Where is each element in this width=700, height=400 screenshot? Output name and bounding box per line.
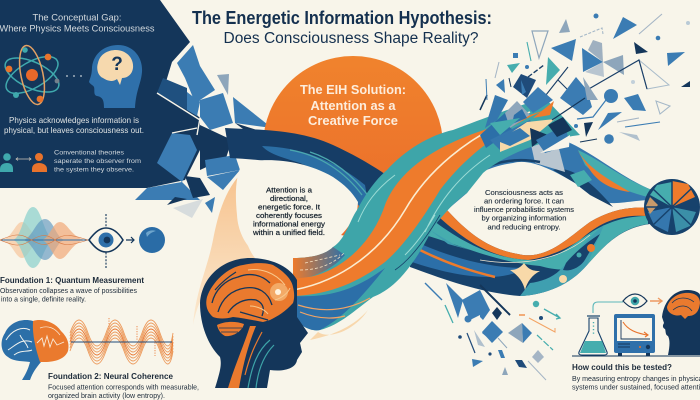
left text bubble copy: within a unified field. xyxy=(252,228,325,237)
icon: head with question brain xyxy=(89,45,142,108)
dots between atom and head xyxy=(66,75,82,77)
icon: head with question brain: ? xyxy=(111,54,123,75)
orange circle heading: Creative Force xyxy=(308,114,398,128)
right text bubble copy xyxy=(474,188,574,232)
right text bubble copy: and reducing entropy. xyxy=(488,222,560,232)
orange circle xyxy=(263,56,443,236)
left text bubble copy xyxy=(252,186,325,237)
left text bubble copy: directional, xyxy=(270,194,308,203)
left text bubble copy: informational energy xyxy=(253,220,325,228)
right text bubble copy: influence probabilistic systems xyxy=(474,205,574,214)
icon: atom xyxy=(0,43,64,107)
panel statement: Physics acknowledges information is xyxy=(9,115,139,125)
observer note: saperate the observer from xyxy=(54,158,141,165)
right text bubble copy: an ordering force. It can xyxy=(484,196,564,206)
test text: By measuring entropy changes in physical xyxy=(572,376,700,383)
icon: wave collapse to particle xyxy=(0,207,165,268)
foundation 2 text: Focused attention corresponds with measurable, xyxy=(48,384,199,392)
left text bubble copy: energetic force. It xyxy=(258,202,320,212)
arrow xyxy=(650,298,662,304)
observer head xyxy=(662,290,700,355)
flask xyxy=(579,316,607,355)
cracked glass shards, left xyxy=(135,45,272,218)
foundation 2 text: organized brain activity (low entropy). xyxy=(48,393,165,400)
panel statement: physical, but leaves consciousness out. xyxy=(4,125,144,135)
right text bubble copy: Consciousness acts as xyxy=(485,188,563,197)
icon: observer and system xyxy=(0,153,47,172)
foundation 2 text xyxy=(48,371,199,400)
foundation 2 text: Foundation 2: Neural Coherence xyxy=(48,371,173,381)
cream halo behind left bubble xyxy=(193,165,255,325)
upper arch ribbon to mandala xyxy=(440,131,652,210)
foundation 1 text: into a single, definite reality. xyxy=(1,296,86,304)
left dark ribbon xyxy=(225,128,420,240)
shard scatter, lower middle xyxy=(425,283,560,380)
panel statement xyxy=(4,115,144,135)
title: The Energetic Information Hypothesis: xyxy=(192,7,492,28)
left text bubble xyxy=(236,160,358,258)
right lower ribbon to mandala xyxy=(405,190,650,296)
left text bubble copy: coherently focuses xyxy=(256,211,322,220)
icon: experiment setup xyxy=(572,290,700,356)
main teal and orange stream from the head xyxy=(287,98,580,340)
monitor with decay chart xyxy=(614,314,655,356)
panel: the conceptual gap xyxy=(0,0,200,188)
title: Does Consciousness Shape Reality? xyxy=(224,30,479,47)
crack line xyxy=(157,93,200,135)
orange circle heading xyxy=(300,83,406,128)
shard burst, upper right xyxy=(480,14,690,153)
panel heading xyxy=(0,12,155,34)
test text: How could this be tested? xyxy=(572,362,672,372)
orange circle heading: The EIH Solution: xyxy=(300,83,406,97)
observer note: Conventional theories xyxy=(54,150,125,156)
observer note xyxy=(54,150,141,174)
eye xyxy=(623,294,647,308)
right text bubble copy: by organizing information xyxy=(482,214,566,222)
mandala circle xyxy=(644,179,700,235)
orange circle heading: Attention as a xyxy=(310,99,397,113)
panel heading: Where Physics Meets Consciousness xyxy=(0,24,155,34)
icon: neural coherence brain and waves xyxy=(2,318,173,380)
foundation 1 text: Foundation 1: Quantum Measurement xyxy=(0,275,144,285)
panel heading: The Conceptual Gap: xyxy=(32,12,122,24)
observer note: the system they observe. xyxy=(54,166,134,174)
foundation 1 text xyxy=(0,275,144,304)
head silhouette with glowing brain xyxy=(200,258,308,388)
foundation 1 text: Observation collapses a wave of possibilities xyxy=(0,288,138,295)
test text xyxy=(572,362,700,392)
title xyxy=(192,7,492,47)
left text bubble copy: Attention is a xyxy=(266,186,313,194)
